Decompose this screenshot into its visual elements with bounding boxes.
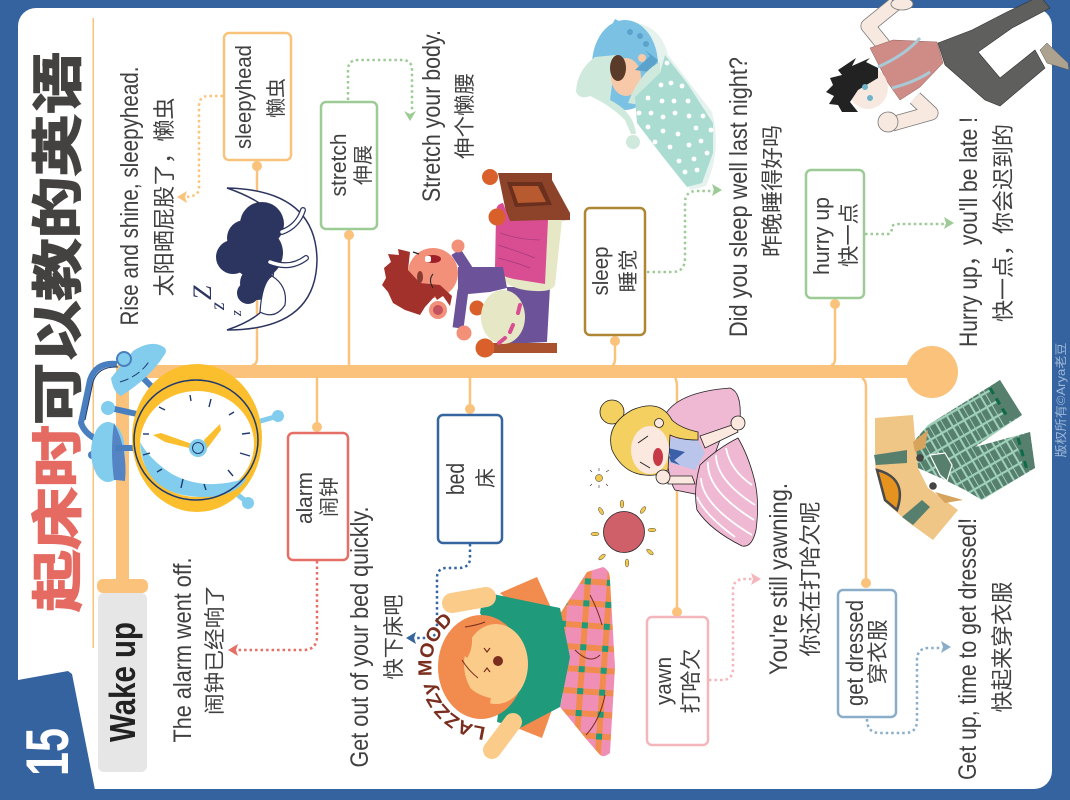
node: sleep: sleep xyxy=(588,246,613,296)
sentence: alarm xyxy=(169,558,227,742)
sentence: stretch xyxy=(418,30,477,202)
node: sleepyhead: sleepyhead xyxy=(231,45,256,149)
node: sleep xyxy=(585,208,645,365)
heading: Wake up: Wake up xyxy=(102,622,143,742)
node: hurry up xyxy=(806,170,864,365)
icon: yawning girl xyxy=(590,388,758,546)
icon: sleeping moon: z xyxy=(229,310,245,317)
sentence: stretch: 伸个懒腰 xyxy=(454,73,477,159)
node: alarm: alarm xyxy=(292,472,317,524)
node: get dressed xyxy=(838,378,896,717)
sentence: get dressed: Get up, time to get dressed! xyxy=(954,518,982,780)
sentence: sleepyhead xyxy=(116,66,177,326)
title rule xyxy=(92,18,94,648)
icon: running boy xyxy=(826,0,1069,132)
title: 可以教的英语 xyxy=(30,52,87,425)
sentence: hurry up: 快一点，你会迟到的 xyxy=(991,124,1016,322)
sentence: alarm: The alarm went off. xyxy=(169,558,197,742)
node: stretch xyxy=(321,102,377,365)
timeline trunk xyxy=(97,346,958,593)
node: sleepyhead xyxy=(224,33,291,365)
sentence: hurry up xyxy=(955,117,1016,347)
arrow: sleep to sentence xyxy=(647,184,722,272)
sentence: sleepyhead: Rise and shine, sleepyhead. xyxy=(116,66,144,326)
arrow: stretch to sentence xyxy=(348,60,416,121)
sentence: sleep: 昨晚睡得好吗 xyxy=(760,125,785,257)
sentence: bed xyxy=(346,506,406,768)
icon: sleeping moon: Z xyxy=(188,285,217,300)
sentence: stretch: Stretch your body. xyxy=(418,30,446,202)
node: get dressed: get dressed xyxy=(842,600,869,706)
node: yawn: 打哈欠 xyxy=(680,648,703,714)
sentence: sleep xyxy=(725,57,785,337)
icon: boy stretching in bed xyxy=(382,169,570,358)
node: alarm xyxy=(288,378,348,560)
node: alarm: 闹钟 xyxy=(318,477,341,517)
node: sleepyhead: 懒虫 xyxy=(265,78,288,118)
heading: Wake up xyxy=(98,593,147,772)
number tab xyxy=(0,671,95,790)
node: get dressed: 穿衣服 xyxy=(867,620,890,684)
node: stretch: 伸展 xyxy=(352,145,375,185)
icon: sleeping moon xyxy=(188,188,317,330)
icon: sleeping moon: z xyxy=(207,302,229,311)
sentence: alarm: 闹钟已经响了 xyxy=(204,585,227,715)
node: bed: 床 xyxy=(475,468,498,488)
sentence: sleepyhead: 太阳晒屁股了，懒虫 xyxy=(152,98,177,296)
sentence: yawn: You're still yawning. xyxy=(765,483,793,675)
title xyxy=(30,52,87,612)
sentence: bed: Get out of your bed quickly. xyxy=(346,506,374,768)
watermark: 版权所有©Arya老豆 xyxy=(1054,342,1068,458)
sentence: yawn xyxy=(765,483,823,675)
arrow: get dressed to sentence xyxy=(867,641,951,733)
sentence: get dressed xyxy=(954,518,1015,780)
arrow: yawn to sentence xyxy=(709,573,761,680)
sentence: get dressed: 快起来穿衣服 xyxy=(990,582,1015,712)
node: stretch: stretch xyxy=(326,134,351,196)
node: hurry up: 快一点 xyxy=(838,203,861,267)
node: yawn: yawn xyxy=(651,657,676,705)
icon: sleeping child xyxy=(576,19,716,190)
icon: alarm clock xyxy=(81,344,284,512)
icon: lazy child under blanket: LAZZZy MOOD xyxy=(418,614,485,740)
title: 起床时 xyxy=(30,425,87,612)
arrow: alarm to sentence xyxy=(228,561,317,656)
sentence: bed: 快下床吧 xyxy=(383,594,406,680)
node: hurry up: hurry up xyxy=(809,197,834,275)
node: yawn xyxy=(647,378,708,745)
sentence: yawn: 你还在打哈欠呢 xyxy=(798,502,823,656)
node: sleep: 睡觉 xyxy=(617,250,640,292)
node: bed: bed xyxy=(442,463,470,495)
node: bed xyxy=(438,378,502,543)
icon: lazy child under blanket xyxy=(418,567,615,759)
sentence: hurry up: Hurry up，you'll be late ! xyxy=(955,117,983,347)
arrow: bed to sentence xyxy=(406,544,470,644)
arrow: hurry up to sentence xyxy=(865,217,954,234)
arrow: sleepyhead to sentence xyxy=(177,96,223,203)
icon: red sun xyxy=(591,500,656,567)
sentence: sleep: Did you sleep well last night? xyxy=(725,57,753,337)
icon: dungarees xyxy=(874,380,1035,540)
number tab: 15 xyxy=(14,728,81,776)
